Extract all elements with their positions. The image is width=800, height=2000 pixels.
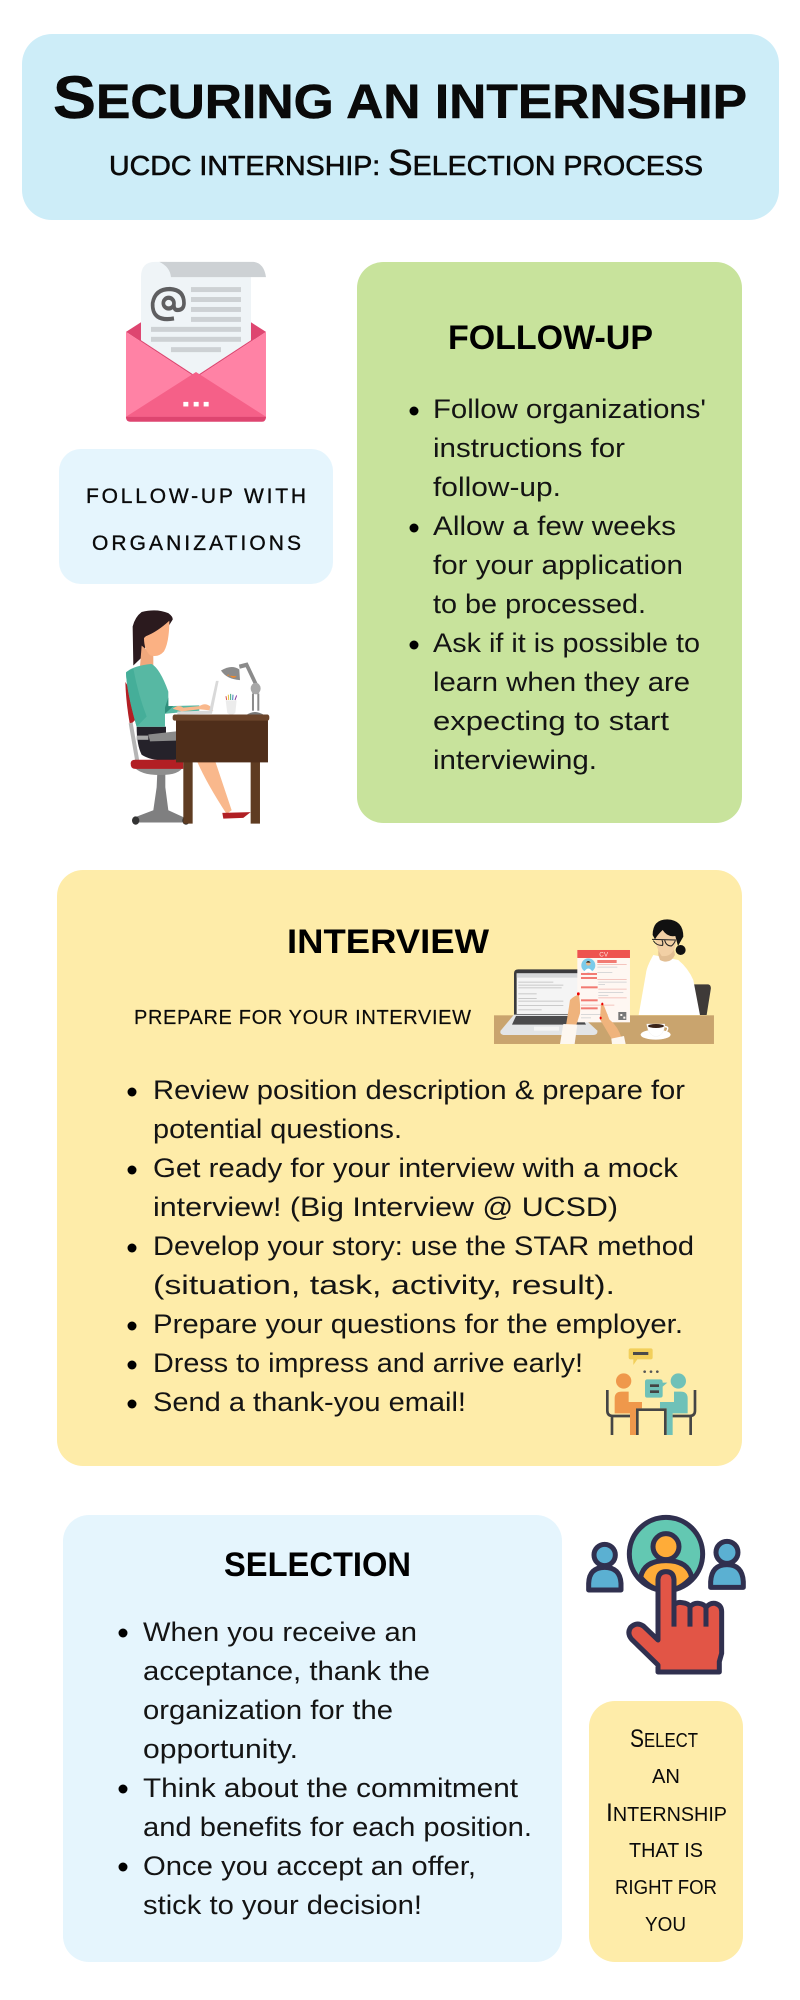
panel: title banner xyxy=(22,34,779,220)
subheading: prepare for your interview: PREPARE FOR YOUR INTERVIEW xyxy=(134,1007,471,1029)
panel: select an internship label: YOU xyxy=(645,1914,686,1936)
bullet list: interview steps: Prepare your questions for the employer. xyxy=(153,1309,683,1339)
bullet list: interview steps: Review position description & prepare for xyxy=(153,1075,685,1105)
panel: follow-up with organizations label xyxy=(59,449,333,584)
subtitle: UCDC INTERNSHIP: SELECTION PROCESS xyxy=(109,142,703,183)
bullet list: interview steps: (situation, task, activity, result). xyxy=(153,1270,615,1300)
icon: recruiter reviewing CV xyxy=(494,919,714,1044)
bullet list: follow-up steps: to be processed. xyxy=(433,589,646,619)
bullet list: follow-up steps: Ask if it is possible to xyxy=(433,628,700,658)
bullet list: selection advice: stick to your decision! xyxy=(143,1890,422,1920)
bullet list: follow-up steps: Follow organizations' xyxy=(433,394,706,424)
panel: follow-up xyxy=(357,262,742,823)
icon: woman working at desk xyxy=(125,610,269,825)
heading: follow-up: FOLLOW-UP xyxy=(448,319,653,357)
panel: follow-up with organizations label: ORGANIZATIONS xyxy=(92,532,301,555)
bullet list: interview steps: Send a thank-you email! xyxy=(153,1387,466,1417)
bullet list: follow-up steps: learn when they are xyxy=(433,667,690,697)
bullet list: follow-up steps: follow-up. xyxy=(433,472,561,502)
bullet list: selection advice: When you receive an xyxy=(143,1617,417,1647)
icon: two people talking at a table xyxy=(607,1348,695,1435)
bullet list: follow-up steps: expecting to start xyxy=(433,706,670,736)
panel: select an internship label: THAT IS xyxy=(629,1840,703,1862)
panel: select an internship label: AN xyxy=(652,1766,680,1788)
bullet list: interview steps: potential questions. xyxy=(153,1114,402,1144)
bullet list: selection advice: acceptance, thank the xyxy=(143,1656,430,1686)
heading: selection: SELECTION xyxy=(224,1546,411,1584)
panel: select an internship label: SELECT xyxy=(630,1725,698,1753)
bullet list: follow-up steps: interviewing. xyxy=(433,745,597,775)
panel: interview xyxy=(57,870,742,1466)
bullet list: interview steps: Dress to impress and arrive early! xyxy=(153,1348,583,1378)
bullet list: follow-up steps: instructions for xyxy=(433,433,625,463)
title: SECURING AN INTERNSHIP xyxy=(53,64,747,131)
bullet list: selection advice: Think about the commitment xyxy=(143,1773,519,1803)
icon: hand selecting a person xyxy=(589,1517,743,1672)
bullet list: interview steps: Develop your story: use the STAR method xyxy=(153,1231,694,1261)
bullet list: follow-up steps xyxy=(410,394,706,775)
icon: recruiter reviewing CV: CV xyxy=(599,951,609,958)
panel: select an internship label xyxy=(589,1701,743,1962)
bullet list: selection advice: opportunity. xyxy=(143,1734,298,1764)
icon: open envelope with letter xyxy=(126,262,266,422)
bullet list: follow-up steps: Allow a few weeks xyxy=(433,511,676,541)
bullet list: selection advice: Once you accept an offer, xyxy=(143,1851,476,1881)
heading: interview: INTERVIEW xyxy=(287,923,490,961)
panel: selection xyxy=(63,1515,562,1962)
bullet list: interview steps xyxy=(128,1075,694,1417)
bullet list: selection advice: and benefits for each position. xyxy=(143,1812,532,1842)
bullet list: selection advice: organization for the xyxy=(143,1695,393,1725)
panel: select an internship label: INTERNSHIP xyxy=(606,1799,727,1827)
panel: follow-up with organizations label: FOLLOW-UP WITH xyxy=(86,485,306,508)
bullet list: selection advice xyxy=(118,1617,532,1920)
bullet list: interview steps: interview! (Big Interview @ UCSD) xyxy=(153,1192,618,1222)
panel: select an internship label: RIGHT FOR xyxy=(615,1877,717,1899)
bullet list: interview steps: Get ready for your interview with a mock xyxy=(153,1153,679,1183)
bullet list: follow-up steps: for your application xyxy=(433,550,683,580)
